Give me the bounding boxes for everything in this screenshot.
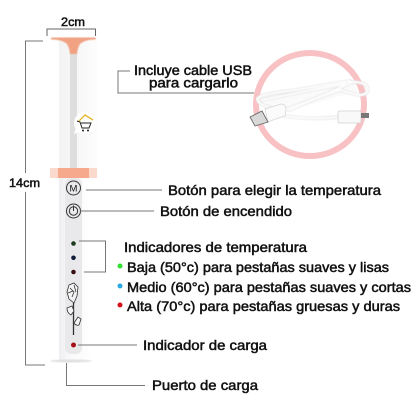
label: charging port: Puerto de carga [152,377,258,393]
device upper shaft [59,40,97,168]
device base shadow [50,360,92,362]
legend item: medium: Medio (60°c) para pestañas suaves y cortas [127,279,411,295]
label: temperature button: Botón para elegir la temperatura [168,182,381,198]
width dimension: 2cm [47,15,96,36]
legend: temperature indicators [118,239,411,314]
bracket: temperature indicators [79,241,106,272]
callout: USB cable: para cargarlo [149,76,238,90]
USB plug metal [250,111,268,126]
device lower body [59,178,89,361]
icon: rose [67,283,81,335]
pink ring with USB cable [250,53,369,156]
charge LED [71,342,76,348]
height dimension: 14cm: 14cm [9,176,40,190]
width dimension: 2cm: 2cm [61,15,85,29]
icon: power button [66,204,80,218]
legend heading: Indicadores de temperatura [124,239,307,255]
icon: M button: M [70,184,78,194]
device peach head [51,38,96,54]
icon: USB cable [250,79,369,126]
USB plug boot [265,104,286,122]
callout: USB cable [118,63,254,93]
legend item: low: Baja (50°c) para pestañas suaves y lisas [127,259,389,275]
legend item: high: Alta (70°c) para pestañas gruesas y duras [127,298,400,314]
label: power button: Botón de encendido [160,203,292,219]
device: eyelash curler [50,38,97,362]
label: charge indicator: Indicador de carga [143,337,267,353]
icon: M button [66,181,80,195]
device peach collar [50,168,97,178]
cable bundle fill [256,79,358,112]
temperature indicator LEDs [71,241,76,274]
callout text: Incluye cable USB [134,63,252,78]
micro connector [338,111,361,123]
icon: shop cart badge [74,112,96,134]
connector line [118,71,254,93]
height dimension: 14cm [9,41,45,365]
label: charging port [66,363,258,393]
